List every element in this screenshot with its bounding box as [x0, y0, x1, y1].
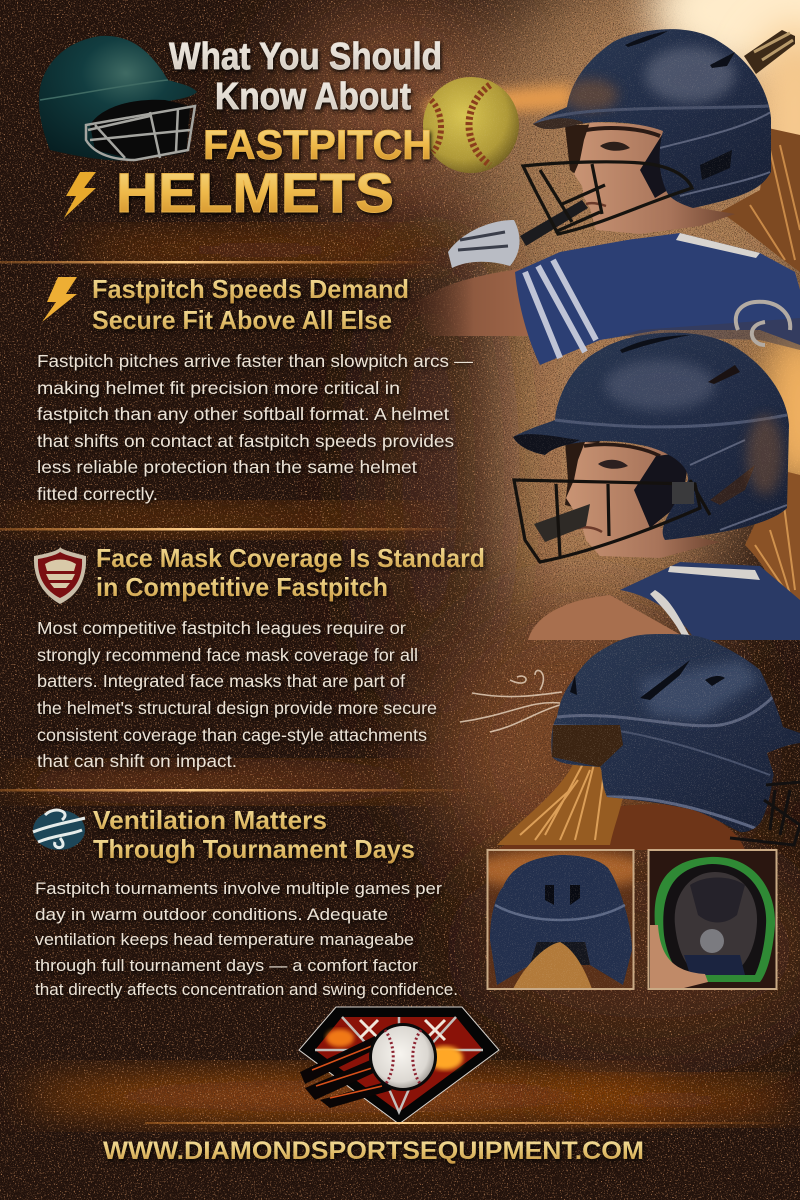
hand holding helmet — [650, 925, 708, 989]
speed streaks — [300, 1036, 392, 1108]
helmet interior shadow — [565, 125, 600, 185]
body text — [37, 618, 437, 771]
thumbnail: interior padding of helmet with green shell — [648, 850, 777, 989]
shoulder — [528, 595, 690, 640]
chin guard — [534, 504, 590, 542]
body text: making helmet fit precision more critical in — [37, 378, 400, 398]
ponytail — [497, 750, 626, 845]
face — [566, 442, 720, 558]
diamond facets — [315, 1017, 483, 1112]
photo: rear three-quarter helmet with ponytail — [460, 628, 800, 850]
ponytail hair — [720, 128, 800, 272]
helmet vents — [620, 335, 690, 353]
body text: the helmet's structural design provide more secure — [37, 698, 437, 718]
helmet vents — [570, 660, 725, 700]
helmet interior shadow — [565, 440, 600, 510]
heading — [92, 274, 409, 335]
mask fragment — [730, 782, 800, 845]
title: HELMETS — [116, 161, 394, 224]
icon: red shield with mask — [34, 547, 86, 604]
title — [116, 36, 442, 224]
heading: Ventilation Matters — [93, 805, 327, 835]
title: What You Should — [169, 36, 442, 78]
body text: fitted correctly. — [37, 484, 158, 504]
body text: that can shift on impact. — [37, 751, 237, 771]
facial features — [600, 142, 630, 151]
body text: through full tournament days — a comfort factor — [35, 956, 418, 975]
title: FASTPITCH — [203, 121, 432, 168]
icon: airflow swirl badge — [33, 810, 85, 850]
panel: fastpitch speeds — [37, 274, 474, 504]
heading: Through Tournament Days — [93, 834, 415, 864]
body text: Fastpitch pitches arrive faster than slowpitch arcs — — [37, 351, 474, 371]
panel: ventilation — [33, 805, 458, 999]
helmet shell — [513, 332, 789, 540]
batter jersey — [515, 233, 800, 365]
body text: fastpitch than any other softball format. A helmet — [37, 404, 449, 424]
body text: strongly recommend face mask coverage for all — [37, 645, 418, 665]
body text: consistent coverage than cage-style attachments — [37, 725, 427, 745]
airflow wisps — [460, 670, 562, 732]
icon: title lightning bolt — [64, 172, 96, 218]
thumbnail: rear view of helmet — [486, 849, 634, 990]
body text: Most competitive fastpitch leagues require or — [37, 618, 406, 638]
photo: top batter with helmet, face mask, bat and jersey — [420, 15, 800, 365]
divider: section two — [0, 789, 480, 792]
softball in flight with motion trail — [423, 77, 519, 173]
batting glove and bat handle — [520, 200, 588, 246]
body text: less reliable protection than the same helmet — [37, 457, 417, 477]
logo: diamond with baseball and speed streaks — [299, 1007, 499, 1124]
jersey number — [736, 302, 790, 345]
photo: middle batter side profile with helmet and mask — [505, 320, 800, 640]
heading: Secure Fit Above All Else — [92, 305, 392, 335]
body text: batters. Integrated face masks that are part of — [37, 671, 405, 691]
body text: day in warm outdoor conditions. Adequate — [35, 905, 388, 924]
divider: footer — [145, 1122, 800, 1124]
icon: section lightning bolt — [42, 277, 77, 322]
batter arm — [420, 268, 540, 336]
heading: Fastpitch Speeds Demand — [92, 274, 409, 304]
body text — [37, 351, 474, 504]
face — [574, 122, 735, 234]
body text: that directly affects concentration and swing confidence. — [35, 980, 458, 999]
heading: in Competitive Fastpitch — [96, 572, 388, 602]
body text: that shifts on contact at fastpitch speeds provides — [37, 431, 454, 451]
panel: face mask coverage — [34, 543, 485, 771]
heading — [93, 805, 415, 864]
diamond outer — [299, 1007, 499, 1124]
jersey — [620, 562, 800, 640]
divider: header — [0, 261, 445, 264]
footer website URL: WWW.DIAMONDSPORTSEQUIPMENT.COM — [103, 1137, 644, 1165]
title: Know About — [215, 76, 411, 118]
helmet vents — [625, 31, 668, 47]
heading: Face Mask Coverage Is Standard — [96, 543, 485, 573]
ear padding — [634, 452, 690, 528]
shoulder — [497, 804, 745, 850]
face mask cage — [523, 162, 692, 234]
helmet shell — [545, 628, 800, 838]
heading — [96, 543, 485, 602]
baseball — [369, 1023, 437, 1091]
bat barrel — [744, 30, 795, 74]
face mask cage — [514, 480, 710, 562]
body text — [35, 879, 458, 999]
body text: ventilation keeps head temperature manageabe — [35, 930, 414, 949]
hair — [745, 470, 800, 625]
body text: Fastpitch tournaments involve multiple games per — [35, 879, 442, 898]
helmet shell — [533, 29, 771, 208]
ear padding — [640, 130, 668, 198]
divider: section one — [0, 528, 470, 530]
icon: teal batting helmet with grey cage — [39, 36, 197, 161]
facial features — [598, 460, 628, 469]
